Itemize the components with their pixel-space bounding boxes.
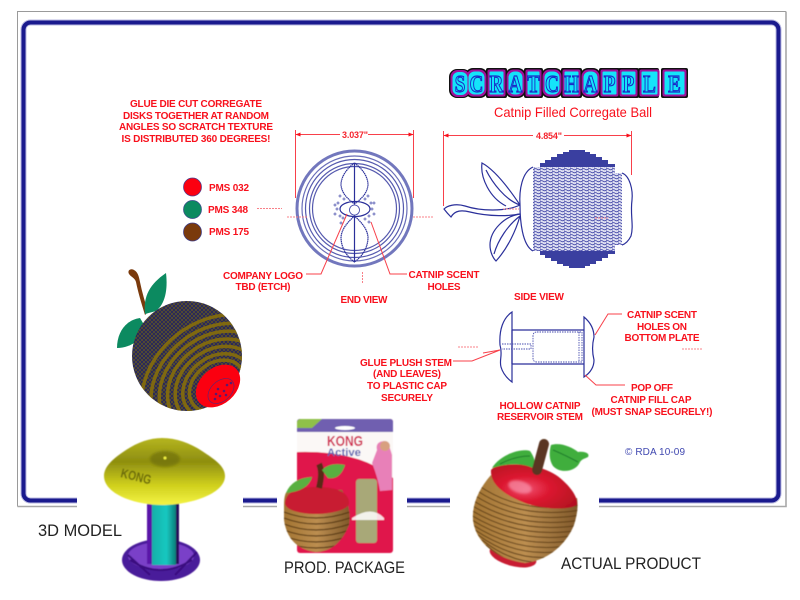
side view labels: (AND LEAVES) bbox=[373, 369, 441, 380]
side view labels: SECURELY bbox=[381, 393, 433, 404]
instruction text: ANGLES SO SCRATCH TEXTURE bbox=[119, 122, 273, 133]
end view labels: TBD (ETCH) bbox=[236, 282, 290, 293]
cap outlines bbox=[520, 167, 632, 251]
3D rendering of ball bbox=[117, 269, 242, 411]
side view labels: RESERVOIR STEM bbox=[497, 412, 583, 423]
colour legend: PMS 032 bbox=[209, 183, 249, 194]
end view labels: CATNIP SCENT bbox=[408, 270, 480, 281]
KONG Active wordmark: KONG bbox=[327, 433, 363, 450]
side view labels: POP OFF bbox=[631, 383, 673, 394]
side view labels: SIDE VIEW bbox=[514, 292, 565, 303]
instruction text: IS DISTRIBUTED 360 DEGREES! bbox=[122, 134, 270, 145]
logo: ScratchApple: SCRATCHAPPLE bbox=[455, 71, 681, 98]
end view labels: HOLES bbox=[428, 282, 461, 293]
instruction text: GLUE DIE CUT CORREGATE bbox=[130, 99, 262, 110]
side view labels: BOTTOM PLATE bbox=[624, 333, 700, 344]
end view labels bbox=[223, 214, 480, 306]
instruction text bbox=[119, 99, 273, 145]
colour legend: PMS 175 bbox=[209, 227, 249, 238]
side view labels: HOLES ON bbox=[637, 322, 687, 333]
end view labels: COMPANY LOGO bbox=[223, 271, 303, 282]
subtitle: Catnip Filled Corregate Ball bbox=[494, 104, 652, 120]
side view labels: CATNIP FILL CAP bbox=[610, 395, 692, 406]
colour legend bbox=[184, 178, 249, 241]
dimension: 3.037 inch bbox=[296, 130, 414, 198]
dashed centre marks bbox=[257, 208, 703, 349]
dimension: 3.037 inch: 3.037" bbox=[342, 130, 368, 140]
side view labels: (MUST SNAP SECURELY!) bbox=[592, 407, 712, 418]
actual product bbox=[471, 444, 589, 572]
side view labels: CATNIP SCENT bbox=[627, 310, 697, 321]
leaves and stem bbox=[444, 205, 520, 217]
copyright: © RDA 10-09 bbox=[625, 447, 685, 458]
side view section drawing bbox=[500, 312, 594, 382]
3D model of stem and cap bbox=[104, 438, 225, 581]
side view labels: GLUE PLUSH STEM bbox=[360, 358, 452, 369]
page frame bbox=[18, 12, 786, 506]
side view labels: HOLLOW CATNIP bbox=[500, 401, 581, 412]
end view drawing bbox=[297, 151, 412, 266]
product package bbox=[284, 419, 393, 553]
side view labels: TO PLASTIC CAP bbox=[367, 381, 447, 392]
etched KONG mark: KONG bbox=[119, 465, 153, 487]
label: 3D model: 3D MODEL bbox=[38, 521, 122, 540]
side view labels bbox=[360, 292, 712, 423]
end view labels: END VIEW bbox=[340, 295, 388, 306]
side view of ball bbox=[444, 150, 632, 268]
colour legend: PMS 348 bbox=[208, 205, 248, 216]
label: product package: PROD. PACKAGE bbox=[284, 558, 405, 577]
dimension: 4.854 inch bbox=[444, 131, 632, 206]
white patches behind photos bbox=[77, 424, 599, 600]
dimension: 4.854 inch: 4.854" bbox=[536, 131, 562, 141]
product package: Active bbox=[327, 447, 361, 459]
instruction text: DISKS TOGETHER AT RANDOM bbox=[123, 111, 269, 122]
label: actual product: ACTUAL PRODUCT bbox=[561, 554, 701, 573]
